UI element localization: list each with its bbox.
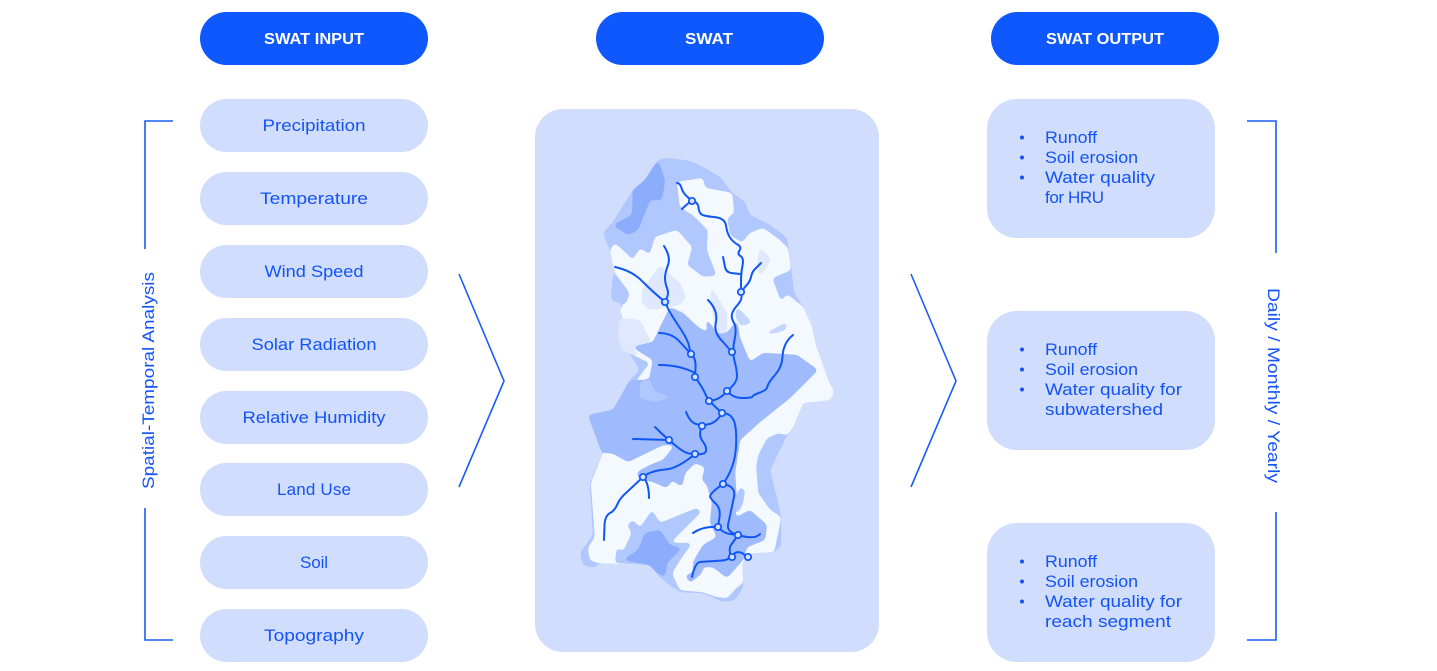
- panel: output for reach segment: Water quality for: [1045, 592, 1182, 611]
- input: relative humidity: [200, 391, 428, 444]
- panel: SWAT watershed map: [535, 109, 879, 652]
- input: land use: Land Use: [277, 480, 351, 499]
- input: solar radiation: Solar Radiation: [252, 335, 376, 354]
- panel: output for subwatershed: Soil erosion: [1045, 360, 1138, 379]
- arrow: model to output: [911, 274, 956, 487]
- panel: output for HRU: for HRU: [1045, 188, 1104, 207]
- input: solar radiation: [200, 318, 428, 371]
- panel: output for reach segment: reach segment: [1045, 612, 1171, 631]
- heading: SWAT input: SWAT INPUT: [264, 31, 364, 48]
- heading: SWAT input: [200, 12, 428, 65]
- bracket: daily, monthly, yearly: Daily / Monthly / Yearly: [1264, 288, 1283, 484]
- input: soil: Soil: [300, 553, 328, 572]
- panel: output for subwatershed: [987, 311, 1215, 450]
- input: soil: [200, 536, 428, 589]
- panel: output for subwatershed: Runoff: [1045, 340, 1097, 359]
- panel: output for subwatershed: subwatershed: [1045, 400, 1163, 419]
- input: temperature: [200, 172, 428, 225]
- map: river junction nodes: [640, 198, 751, 560]
- input: land use: [200, 463, 428, 516]
- bracket: spatial-temporal analysis: [139, 121, 173, 640]
- map: watershed land areas: [580, 158, 834, 602]
- input: precipitation: [200, 99, 428, 152]
- panel: output for reach segment: Soil erosion: [1045, 572, 1138, 591]
- heading: SWAT output: [991, 12, 1219, 65]
- input: temperature: Temperature: [260, 189, 368, 208]
- bracket: daily, monthly, yearly: [1247, 121, 1283, 640]
- input: topography: Topography: [264, 626, 365, 645]
- bracket: spatial-temporal analysis: Spatial-Temporal Analysis: [139, 272, 158, 489]
- panel: output for HRU: [987, 99, 1215, 238]
- input: precipitation: Precipitation: [262, 116, 366, 135]
- panel: output for reach segment: [987, 523, 1215, 662]
- panel: output for subwatershed: Water quality for: [1045, 380, 1182, 399]
- panel: output for HRU: Runoff: [1045, 128, 1097, 147]
- input: wind speed: [200, 245, 428, 298]
- input: wind speed: Wind Speed: [264, 262, 364, 281]
- input list: [200, 99, 428, 662]
- panel: output for reach segment: Runoff: [1045, 552, 1097, 571]
- arrow: input to model: [459, 274, 504, 487]
- input: topography: [200, 609, 428, 662]
- heading: SWAT: [596, 12, 824, 65]
- heading: SWAT output: SWAT OUTPUT: [1046, 31, 1164, 48]
- panel: output for HRU: Water quality: [1045, 168, 1156, 187]
- heading: SWAT: SWAT: [685, 31, 733, 48]
- map: river network: [604, 183, 793, 577]
- input: relative humidity: Relative Humidity: [242, 408, 386, 427]
- panel: output for HRU: Soil erosion: [1045, 148, 1138, 167]
